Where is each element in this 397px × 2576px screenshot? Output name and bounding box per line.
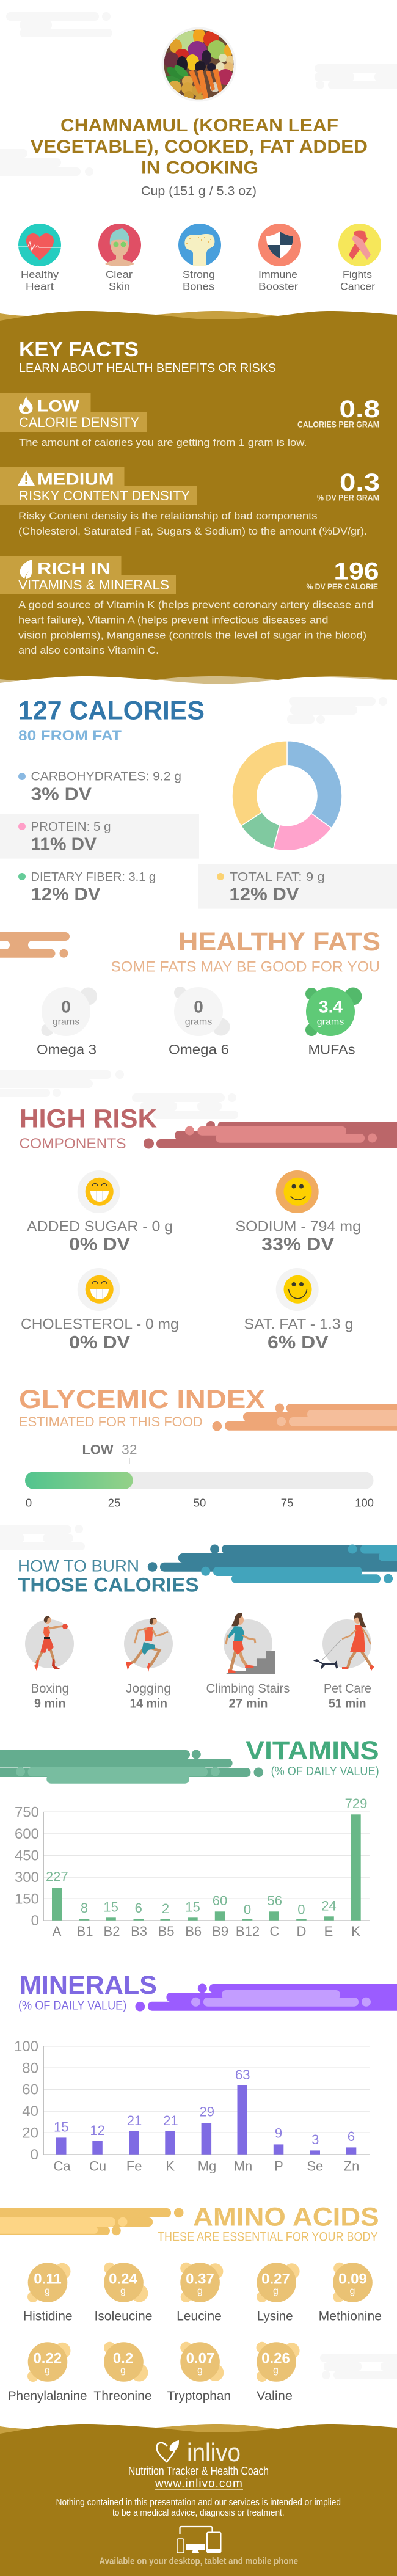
bar chart: minerals: Fe bbox=[126, 2158, 142, 2173]
stat: carbohydrates: CARBOHYDRATES: 9.2 g bbox=[31, 770, 181, 783]
label: climbing stairs bbox=[206, 1682, 290, 1710]
stat: mufas: grams bbox=[317, 1016, 344, 1027]
stat: valine: Valine bbox=[257, 2389, 293, 2403]
heading: calories: 127 CALORIES bbox=[18, 696, 205, 726]
gauge marker: 32 bbox=[122, 1442, 137, 1458]
key fact: low calorie density: LOW bbox=[37, 397, 80, 415]
heading: vitamins bbox=[246, 1736, 379, 1778]
heading: key facts: LEARN ABOUT HEALTH BENEFITS OR RISKS bbox=[19, 362, 276, 375]
bar chart: vitamins: 15 bbox=[103, 1900, 118, 1915]
bar chart: vitamins: 0 bbox=[244, 1902, 251, 1917]
stat: methionine: Methionine bbox=[319, 2310, 382, 2324]
key fact: low calorie density: The amount of calories you are getting from 1 gram is low. bbox=[19, 437, 307, 448]
activity: jogging bbox=[124, 1618, 173, 1672]
bar chart: vitamins: 2 bbox=[162, 1901, 169, 1916]
logo: inlivo bbox=[157, 2438, 241, 2467]
bar chart: minerals: 15 bbox=[54, 2120, 69, 2134]
bar chart: vitamins: 600 bbox=[15, 1826, 39, 1842]
bar chart: vitamins: B12 bbox=[236, 1924, 260, 1939]
key fact: low calorie density: CALORIE DENSITY bbox=[19, 415, 139, 430]
stat: tryptophan: g bbox=[197, 2365, 203, 2376]
icon: devices bbox=[177, 2527, 221, 2553]
title bbox=[31, 115, 368, 178]
activity: climbing stairs bbox=[224, 1613, 275, 1674]
bar chart: vitamins: B3 bbox=[131, 1924, 147, 1939]
stat: sodium: 33% DV bbox=[261, 1235, 335, 1255]
panel: healthy fats bbox=[0, 927, 381, 1057]
heading: how to burn: HOW TO BURN bbox=[18, 1556, 139, 1575]
stat: phenylalanine: 0.22 bbox=[33, 2351, 62, 2366]
bar chart: minerals: 80 bbox=[22, 2060, 38, 2077]
bar chart: minerals: Zn bbox=[344, 2158, 359, 2173]
label: boxing: 9 min bbox=[34, 1697, 66, 1710]
stat: phenylalanine: Phenylalanine bbox=[8, 2389, 87, 2403]
heading: high risk bbox=[20, 1104, 157, 1152]
label: boxing bbox=[31, 1682, 69, 1710]
label: fights cancer: Fights bbox=[343, 269, 372, 280]
heading: key facts: KEY FACTS bbox=[19, 338, 139, 360]
stat: omega 3 bbox=[37, 987, 97, 1057]
stat: lysine bbox=[257, 2263, 300, 2324]
bar chart: minerals: Se bbox=[307, 2158, 323, 2173]
key fact: rich in vitamins and minerals: heart failure), Vitamin A (helps prevent infectious diseases and bbox=[18, 615, 329, 626]
footer text: Nothing contained in this presentation and our services is intended or implied bbox=[56, 2497, 341, 2508]
icon: healthy heart bbox=[18, 224, 61, 266]
heading: healthy fats: HEALTHY FATS bbox=[178, 927, 381, 957]
footer text: to be a medical advice, diagnosis or treatment. bbox=[112, 2508, 285, 2518]
stat: carbohydrates: 3% DV bbox=[31, 784, 92, 804]
gauge bar bbox=[25, 1472, 374, 1489]
bar chart: vitamins: 227 bbox=[46, 1869, 68, 1884]
stat: threonine: Threonine bbox=[93, 2389, 152, 2403]
bar chart: minerals: 63 bbox=[235, 2067, 250, 2082]
bar chart: minerals: 21 bbox=[127, 2113, 142, 2128]
stat: omega 3: Omega 3 bbox=[37, 1042, 97, 1057]
bar chart: vitamins: 6 bbox=[135, 1900, 142, 1916]
stat: isoleucine: Isoleucine bbox=[94, 2310, 153, 2324]
heading: healthy fats bbox=[111, 927, 381, 975]
label: jogging: 14 min bbox=[129, 1697, 167, 1710]
key fact: medium risky content density: MEDIUM bbox=[37, 470, 114, 489]
stat: dietary fiber bbox=[18, 870, 156, 904]
icon: immune booster bbox=[258, 224, 301, 266]
footer text: Nutrition Tracker & Health Coach bbox=[128, 2465, 269, 2478]
heading: glycemic index: GLYCEMIC INDEX bbox=[19, 1385, 265, 1414]
label: fights cancer bbox=[340, 269, 375, 292]
bar chart: minerals: K bbox=[166, 2158, 175, 2173]
icon: clear skin bbox=[98, 224, 141, 266]
bar chart: minerals: Ca bbox=[54, 2158, 71, 2173]
gauge marker bbox=[82, 1442, 137, 1464]
stat: sodium bbox=[236, 1170, 361, 1255]
key fact: medium risky content density bbox=[0, 467, 380, 537]
gauge axis: 75 bbox=[281, 1497, 293, 1509]
key fact: medium risky content density: 0.3 bbox=[340, 469, 380, 496]
label: pet care bbox=[324, 1682, 371, 1710]
heading: minerals: MINERALS bbox=[20, 1971, 157, 2000]
stat: histidine: 0.11 bbox=[34, 2271, 62, 2287]
footer text: www.inlivo.com bbox=[155, 2478, 242, 2490]
label: fights cancer: Cancer bbox=[340, 281, 375, 292]
bar chart: vitamins: B6 bbox=[185, 1924, 202, 1939]
heading: vitamins: (% OF DAILY VALUE) bbox=[271, 1765, 379, 1778]
label: immune booster: Booster bbox=[258, 281, 298, 292]
bar chart: minerals: P bbox=[274, 2158, 283, 2173]
call to action: Available on your desktop, tablet and mobile phone bbox=[99, 2556, 298, 2566]
stat: leucine bbox=[177, 2263, 223, 2324]
heading: glycemic index bbox=[19, 1385, 265, 1429]
stat: omega 3: 0 bbox=[61, 997, 71, 1016]
gauge axis: 0 bbox=[26, 1497, 32, 1509]
stat: methionine: 0.09 bbox=[338, 2271, 367, 2287]
stat: omega 6: 0 bbox=[194, 997, 203, 1016]
icon: leaf bbox=[20, 560, 32, 579]
stat: omega 3: grams bbox=[53, 1016, 79, 1027]
bar chart: minerals bbox=[14, 2038, 370, 2173]
key fact: medium risky content density: Risky Content density is the relationship of bad components bbox=[18, 510, 318, 522]
panel: glycemic index bbox=[19, 1385, 397, 1509]
bar chart: vitamins: A bbox=[53, 1924, 62, 1939]
stat: threonine: g bbox=[120, 2365, 126, 2376]
label: clear skin: Clear bbox=[106, 269, 133, 280]
icon: warning triangle bbox=[18, 470, 35, 486]
bar chart: vitamins: 450 bbox=[15, 1847, 39, 1864]
title: IN COOKING bbox=[141, 158, 258, 178]
stat: protein: PROTEIN: 5 g bbox=[31, 820, 111, 834]
icon: flame bbox=[19, 396, 33, 414]
stat: threonine: 0.2 bbox=[113, 2351, 133, 2366]
bar chart: vitamins: E bbox=[324, 1924, 333, 1939]
stat: methionine bbox=[319, 2263, 382, 2324]
header: food image bbox=[161, 27, 236, 103]
label: jogging: Jogging bbox=[126, 1682, 171, 1696]
heading: glycemic index: ESTIMATED FOR THIS FOOD bbox=[19, 1414, 203, 1429]
stat: methionine: g bbox=[350, 2286, 355, 2296]
bar chart: vitamins: 150 bbox=[15, 1891, 39, 1907]
key fact: rich in vitamins and minerals: % DV PER CALORIE bbox=[307, 582, 378, 591]
bar chart: minerals: 21 bbox=[163, 2113, 178, 2128]
bar chart: vitamins: 24 bbox=[321, 1898, 337, 1913]
bar chart: vitamins: 750 bbox=[15, 1804, 39, 1820]
key fact: rich in vitamins and minerals: VITAMINS & MINERALS bbox=[18, 577, 169, 593]
heading: calories: 80 FROM FAT bbox=[18, 728, 122, 744]
bar chart: vitamins: B2 bbox=[104, 1924, 120, 1939]
heading: high risk: HIGH RISK bbox=[20, 1104, 157, 1134]
bar chart: vitamins: B5 bbox=[158, 1924, 174, 1939]
stat: leucine: g bbox=[197, 2286, 203, 2296]
stat: histidine bbox=[23, 2263, 73, 2324]
stat: saturated fat: 6% DV bbox=[268, 1333, 329, 1352]
stat: leucine: Leucine bbox=[177, 2310, 222, 2324]
stat: cholesterol bbox=[21, 1268, 179, 1352]
stat: valine bbox=[257, 2342, 300, 2403]
bar chart: vitamins bbox=[15, 1796, 370, 1939]
serving size: Cup (151 g / 5.3 oz) bbox=[141, 183, 257, 198]
stat: cholesterol: 0% DV bbox=[69, 1333, 131, 1352]
stat: dietary fiber: 12% DV bbox=[31, 885, 101, 904]
panel: calories bbox=[0, 696, 397, 909]
stat: added sugar: ADDED SUGAR - 0 g bbox=[27, 1218, 173, 1235]
stat: lysine: g bbox=[273, 2286, 279, 2296]
stat: isoleucine: g bbox=[120, 2286, 126, 2296]
key fact: rich in vitamins and minerals: vision problems), Manganese (controls the level of sugar in the blood) bbox=[18, 629, 366, 641]
bar chart: vitamins: C bbox=[269, 1924, 279, 1939]
bar chart: minerals: Mg bbox=[198, 2158, 216, 2173]
label: clear skin: Skin bbox=[109, 281, 130, 292]
label: healthy heart: Healthy bbox=[21, 269, 59, 280]
bar chart: minerals: Cu bbox=[89, 2158, 106, 2173]
heading: healthy fats: SOME FATS MAY BE GOOD FOR YOU bbox=[111, 959, 380, 975]
bar chart: vitamins: 0 bbox=[297, 1902, 305, 1917]
heading: amino acids: AMINO ACIDS bbox=[193, 2202, 379, 2231]
key fact: low calorie density bbox=[0, 393, 380, 448]
activity: boxing bbox=[25, 1616, 74, 1671]
key fact: low calorie density: 0.8 bbox=[340, 396, 380, 423]
gauge marker: LOW bbox=[82, 1442, 114, 1458]
key fact: medium risky content density: (Cholesterol, Saturated Fat, Sugars & Sodium) to the amount (%DV/gr). bbox=[18, 525, 367, 537]
stat: tryptophan: 0.07 bbox=[186, 2351, 214, 2366]
panel: minerals bbox=[14, 1971, 397, 2173]
panel: how to burn those calories bbox=[18, 1544, 397, 1710]
label: strong bones: Bones bbox=[183, 281, 214, 292]
heading: vitamins: VITAMINS bbox=[246, 1736, 379, 1765]
bar chart: vitamins: 300 bbox=[15, 1869, 39, 1886]
bar chart: vitamins: B1 bbox=[77, 1924, 93, 1939]
heading: minerals bbox=[18, 1971, 157, 2012]
key fact: medium risky content density: RISKY CONTENT DENSITY bbox=[19, 488, 190, 503]
label: jogging bbox=[126, 1682, 171, 1710]
stat: isoleucine bbox=[94, 2263, 153, 2324]
bar chart: minerals: 100 bbox=[14, 2038, 38, 2055]
stat: phenylalanine bbox=[8, 2342, 87, 2403]
heading: how to burn bbox=[18, 1556, 199, 1596]
stat: mufas: MUFAs bbox=[308, 1042, 355, 1057]
bar chart: minerals: 12 bbox=[90, 2123, 105, 2138]
bar chart: vitamins: 15 bbox=[185, 1900, 200, 1915]
stat: protein bbox=[0, 814, 199, 859]
label: strong bones bbox=[183, 269, 215, 292]
stat: omega 6: Omega 6 bbox=[169, 1042, 229, 1057]
stat: histidine: g bbox=[45, 2286, 50, 2296]
bar chart: minerals: 6 bbox=[348, 2129, 355, 2144]
label: healthy heart bbox=[21, 269, 59, 292]
stat: tryptophan: Tryptophan bbox=[167, 2389, 231, 2403]
heading: high risk: COMPONENTS bbox=[20, 1136, 126, 1152]
bar chart: vitamins: 60 bbox=[213, 1893, 227, 1908]
key fact: rich in vitamins and minerals: A good source of Vitamin K (helps prevent coronary artery disease and bbox=[18, 599, 374, 611]
heading: how to burn: THOSE CALORIES bbox=[18, 1574, 199, 1596]
key fact: rich in vitamins and minerals: RICH IN bbox=[37, 560, 111, 578]
label: pet care: 51 min bbox=[329, 1697, 366, 1710]
stat: saturated fat bbox=[244, 1268, 353, 1352]
panel: vitamins bbox=[0, 1736, 379, 1939]
gauge axis: 50 bbox=[194, 1497, 206, 1509]
stat: valine: 0.26 bbox=[261, 2351, 290, 2366]
stat: total fat: 12% DV bbox=[230, 885, 299, 904]
panel: amino acids bbox=[0, 2202, 382, 2403]
bar chart: minerals: 3 bbox=[311, 2132, 319, 2147]
stat: lysine: 0.27 bbox=[261, 2271, 290, 2287]
donut chart bbox=[232, 741, 342, 851]
stat: saturated fat: SAT. FAT - 1.3 g bbox=[244, 1316, 353, 1333]
stat: added sugar: 0% DV bbox=[69, 1235, 131, 1255]
bar chart: vitamins: 56 bbox=[268, 1893, 282, 1908]
title: CHAMNAMUL (KOREAN LEAF bbox=[60, 115, 338, 136]
stat: leucine: 0.37 bbox=[186, 2271, 214, 2287]
stat: protein: 11% DV bbox=[31, 834, 97, 854]
stat: added sugar bbox=[27, 1170, 173, 1255]
heading: minerals: (% OF DAILY VALUE) bbox=[18, 1999, 126, 2012]
footer text bbox=[56, 2465, 341, 2518]
activity: pet care bbox=[313, 1612, 374, 1671]
bar chart: minerals: 9 bbox=[275, 2125, 282, 2140]
stat: sodium: SODIUM - 794 mg bbox=[236, 1218, 361, 1235]
gauge axis bbox=[26, 1497, 374, 1509]
heading: amino acids bbox=[158, 2202, 379, 2244]
stat: valine: g bbox=[273, 2365, 279, 2376]
stat: mufas bbox=[305, 987, 362, 1057]
heading: calories bbox=[18, 696, 205, 744]
gauge axis: 25 bbox=[108, 1497, 120, 1509]
panel: high risk bbox=[20, 1104, 397, 1352]
label: climbing stairs: Climbing Stairs bbox=[206, 1682, 290, 1696]
key fact: low calorie density: CALORIES PER GRAM bbox=[297, 420, 379, 429]
stat: omega 6 bbox=[169, 987, 230, 1057]
label: pet care: Pet Care bbox=[324, 1682, 371, 1696]
stat: phenylalanine: g bbox=[45, 2365, 50, 2376]
label: immune booster bbox=[258, 269, 298, 292]
stat: threonine bbox=[93, 2342, 152, 2403]
panel: key facts bbox=[0, 311, 397, 689]
stat: carbohydrates bbox=[18, 770, 181, 804]
stat: tryptophan bbox=[167, 2342, 231, 2403]
label: clear skin bbox=[106, 269, 133, 292]
bar chart: vitamins: 8 bbox=[81, 1900, 88, 1916]
benefits row bbox=[18, 224, 381, 292]
heading: key facts bbox=[19, 338, 276, 375]
label: immune booster: Immune bbox=[258, 269, 297, 280]
key fact: rich in vitamins and minerals bbox=[0, 556, 379, 656]
bar chart: vitamins: D bbox=[296, 1924, 306, 1939]
bar chart: minerals: 29 bbox=[199, 2104, 214, 2120]
bar chart: minerals: Mn bbox=[234, 2158, 252, 2173]
bar chart: minerals: 60 bbox=[22, 2082, 38, 2098]
icon: fights cancer bbox=[338, 224, 381, 266]
stat: mufas: 3.4 bbox=[319, 997, 343, 1016]
title: VEGETABLE), COOKED, FAT ADDED bbox=[31, 137, 368, 157]
label: strong bones: Strong bbox=[183, 269, 215, 280]
label: healthy heart: Heart bbox=[26, 281, 54, 292]
bar chart: vitamins: 729 bbox=[345, 1796, 367, 1811]
stat: isoleucine: 0.24 bbox=[109, 2271, 138, 2287]
stat: histidine: Histidine bbox=[23, 2310, 73, 2324]
key fact: rich in vitamins and minerals: and also contains Vitamin C. bbox=[18, 644, 159, 656]
stat: total fat: TOTAL FAT: 9 g bbox=[230, 870, 325, 884]
stat: lysine: Lysine bbox=[257, 2310, 293, 2324]
label: boxing: Boxing bbox=[31, 1682, 69, 1696]
key fact: rich in vitamins and minerals: 196 bbox=[333, 558, 379, 585]
stat: cholesterol: CHOLESTEROL - 0 mg bbox=[21, 1316, 179, 1333]
panel: footer bbox=[0, 2424, 397, 2576]
bar chart: minerals: 40 bbox=[22, 2103, 38, 2120]
stat: total fat bbox=[198, 864, 397, 909]
stat: dietary fiber: DIETARY FIBER: 3.1 g bbox=[31, 870, 156, 884]
bar chart: vitamins: B9 bbox=[212, 1924, 228, 1939]
label: climbing stairs: 27 min bbox=[228, 1697, 268, 1710]
bar chart: vitamins: 0 bbox=[31, 1913, 39, 1929]
stat: omega 6: grams bbox=[185, 1016, 212, 1027]
key fact: medium risky content density: % DV PER GRAM bbox=[317, 494, 379, 502]
bar chart: vitamins: K bbox=[351, 1924, 360, 1939]
icon: strong bones bbox=[178, 224, 221, 266]
gauge axis: 100 bbox=[355, 1497, 374, 1509]
bar chart: minerals: 0 bbox=[31, 2147, 38, 2163]
logo: inlivo: inlivo bbox=[187, 2438, 241, 2467]
bar chart: minerals: 20 bbox=[22, 2125, 38, 2142]
